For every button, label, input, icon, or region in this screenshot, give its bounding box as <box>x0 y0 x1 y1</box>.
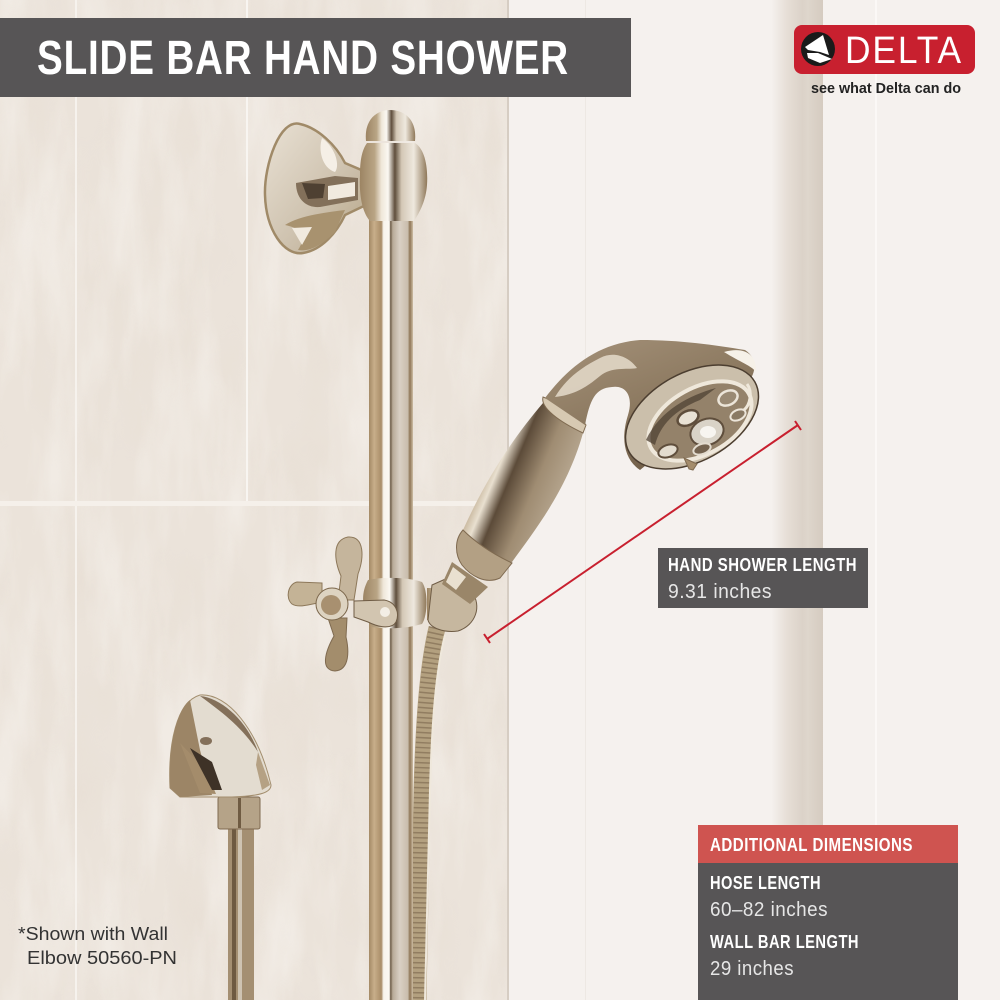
slide knob <box>354 600 398 627</box>
logo badge <box>794 25 975 74</box>
title banner <box>0 18 631 97</box>
hex nut <box>218 797 260 829</box>
spray face inner disc <box>635 365 765 477</box>
wall bar length value: 29 inches <box>710 958 794 980</box>
hose from hand shower to slide bar bottom <box>418 628 445 1000</box>
tagline: see what Delta can do <box>811 80 961 97</box>
top collar <box>360 143 427 221</box>
lower collar <box>456 530 512 580</box>
cross handle: upper arm <box>336 537 362 600</box>
logo emblem <box>801 32 835 66</box>
swivel mount <box>428 577 477 631</box>
selector tab <box>684 458 697 470</box>
cross handle: lower arm <box>325 618 348 671</box>
handle body <box>463 403 583 562</box>
logo: Delta <box>794 25 975 97</box>
hose below elbow <box>228 826 254 1000</box>
wall bar length heading: WALL BAR LENGTH <box>710 931 859 952</box>
title: SLIDE BAR HAND SHOWER <box>37 32 569 85</box>
cross handle: left arm <box>288 582 322 606</box>
top wall bracket <box>265 123 366 253</box>
top knob <box>366 110 415 141</box>
callout value: 9.31 inches <box>668 581 772 603</box>
hose length value: 60–82 inches <box>710 899 828 921</box>
head neck and dome <box>545 340 754 470</box>
gooseneck highlight <box>555 355 637 397</box>
spray nozzles <box>657 384 750 460</box>
callout heading: HAND SHOWER LENGTH <box>668 555 857 575</box>
footnote <box>18 923 177 968</box>
footnote: *Shown with Wall <box>18 923 168 944</box>
dimension line: hand shower length <box>484 421 801 643</box>
callout: hand shower length <box>658 548 868 608</box>
cross handle: hub <box>316 588 348 620</box>
logo wordmark: DELTA <box>845 30 963 72</box>
panel header <box>698 825 958 863</box>
hand shower <box>428 340 776 631</box>
slide block <box>363 578 426 628</box>
slide bracket <box>288 537 449 671</box>
spray face rim <box>608 344 776 490</box>
panel: additional dimensions <box>698 825 958 1000</box>
hose length heading: HOSE LENGTH <box>710 872 821 893</box>
bar tube <box>369 215 413 1000</box>
spray face top bright edge <box>724 350 756 372</box>
connector <box>427 588 449 620</box>
elbow cap <box>170 695 271 797</box>
lower neck <box>442 562 488 604</box>
background: marble tile wall <box>0 0 509 1000</box>
upper collar <box>543 397 586 433</box>
slide bar <box>265 110 449 1000</box>
wall elbow <box>170 695 271 1000</box>
panel header: ADDITIONAL DIMENSIONS <box>710 834 913 855</box>
footnote: Elbow 50560-PN <box>27 947 177 968</box>
